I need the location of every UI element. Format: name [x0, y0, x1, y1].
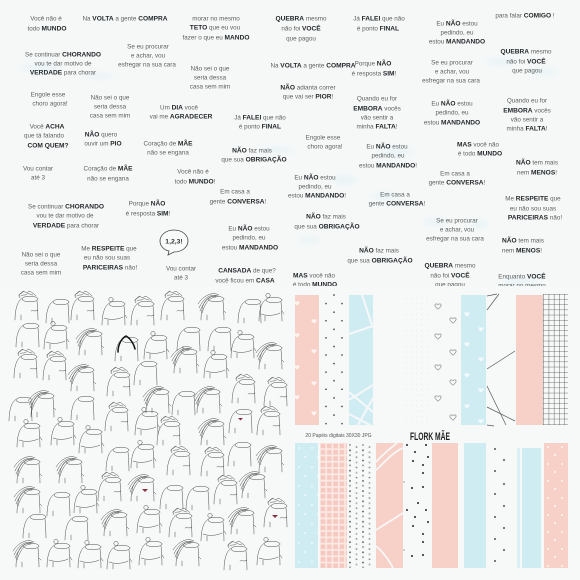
- phrase: Se continuar CHORANDO: vou te dar motivo de: [34, 60, 92, 67]
- phrase: Não sei o que: casa sem mim: [21, 269, 61, 276]
- phrase: Vou contar até 3: até 3: [174, 274, 188, 281]
- phrase: Em casa a gente CONVERSA: gente CONVERSA!: [429, 179, 485, 186]
- phrase: Eu NÃO estou pedindo: Eu NÃO estou: [366, 143, 408, 150]
- phrase: Coração de MÃE: Coração de MÃE: [84, 165, 132, 172]
- phrase: Se continuar CHORANDO: vou te dar motivo de: [36, 212, 94, 219]
- phrase: Você ACHA: que tá falando: [24, 132, 64, 139]
- phrase: Vou contar até 3: Vou contar: [23, 165, 53, 172]
- paper: black grid: [543, 294, 568, 425]
- phrase: Eu NÃO estou pedindo: pedindo, eu: [233, 234, 266, 241]
- phrase: Se eu procurar: Se eu procurar: [436, 217, 478, 224]
- phrase: QUEBRA mesmo: QUEBRA mesmo: [425, 262, 475, 269]
- panel: phrases: [21, 12, 562, 289]
- phrase: Já FALEI: é ponto FINAL: [357, 25, 399, 32]
- phrase: Já FALEI: é ponto FINAL: [239, 123, 281, 130]
- paper: blue strip: [517, 448, 541, 568]
- phrase: Coração de MÃE: não se engana: [147, 149, 189, 156]
- title: FLORK MÃE: FLORK MÃE: [410, 430, 450, 443]
- phrase: Você não é todo MUNDO: todo MUNDO: [28, 25, 66, 32]
- phrase: MAS você não: é todo MUNDO: [458, 150, 502, 157]
- phrase: Me RESPEITE: PARICEIRAS não!: [83, 264, 137, 271]
- phrase: Eu NÃO estou pedindo: pedindo, eu: [441, 29, 474, 36]
- phrase: Coração de MÃE: Coração de MÃE: [144, 140, 192, 147]
- paper: plain pink: [516, 295, 543, 425]
- phrase: NÃO faz mais: que sua OBRIGAÇÃO: [294, 223, 360, 230]
- figure with black hair: [115, 336, 138, 361]
- phrase: Você não é todo MUNDO: todo MUNDO!: [175, 178, 215, 185]
- phrase: Não sei o que: Não sei o que: [91, 94, 130, 101]
- phrase: NÃO tem mais: nem MENOS!: [517, 169, 557, 176]
- phrase: Porque NÃO: Porque NÃO: [355, 60, 391, 67]
- phrase: morar no mesmo teto: morar no mesmo: [192, 15, 240, 22]
- caption: 20 papéis digitais: 20 Papéis digitais 30X30 JPG: [305, 433, 372, 439]
- phrase: Porque NÃO: Porque NÃO: [129, 200, 165, 207]
- phrase: Em casa a gente CONVERSA: gente CONVERSA!: [210, 198, 266, 205]
- phrase: Enquanto VOCÊ: morar no mesmo: [498, 282, 546, 289]
- phrase: Se continuar CHORANDO: Se continuar CHORANDO: [28, 203, 104, 210]
- phrase: Se continuar CHORANDO: Se continuar CHORANDO: [25, 51, 101, 58]
- phrase: Se eu procurar: esfregar na sua cara: [422, 77, 480, 84]
- phrase: Quando eu for EMBORA: vão sentir a: [511, 116, 544, 123]
- phrase: Você ACHA: COM QUEM?: [27, 142, 69, 149]
- phrase: Quando eu for EMBORA: EMBORA vocês: [503, 107, 551, 114]
- panel: digital papers top row: [294, 293, 568, 427]
- phrase: Eu NÃO estou pedindo: estou MANDANDO: [222, 244, 278, 251]
- phrase: Quando eu for EMBORA: vão sentir a: [361, 114, 394, 121]
- figures row 2: [16, 321, 284, 369]
- panel: digital papers bottom row: [295, 443, 568, 568]
- figures row 4: [9, 374, 287, 435]
- paper: pink speckled: [544, 443, 568, 568]
- phrase: Eu NÃO estou pedindo: estou MANDANDO!: [359, 162, 417, 169]
- phrase: QUEBRA mesmo: QUEBRA mesmo: [501, 48, 551, 55]
- paper: blue hearts: [461, 295, 486, 425]
- paper: diagonal black lines: [487, 294, 515, 426]
- red details on figures: [142, 418, 278, 518]
- paper: black dots: [404, 444, 429, 557]
- panel: flork figures: [9, 291, 287, 570]
- figures row 6: [14, 440, 284, 483]
- figures row 8: [23, 498, 287, 541]
- phrase: MAS você não: MAS você não: [293, 272, 335, 279]
- phrase: QUEBRA mesmo: que pagou: [435, 281, 465, 288]
- phrase: morar no mesmo teto: fazer o que eu MANDO: [183, 34, 249, 41]
- phrase: NÃO quero ouvir um PIO: ouvir um PIO: [84, 140, 122, 147]
- phrase: Quando eu for EMBORA: Quando eu for: [507, 97, 547, 104]
- phrase: Eu NÃO estou pedindo: Eu NÃO estou: [294, 174, 336, 181]
- phrase: Você ACHA: Você ACHA: [30, 123, 64, 130]
- phrase: NÃO faz mais: NÃO faz mais: [359, 247, 399, 254]
- phrase: Não sei o que: Não sei o que: [191, 65, 230, 72]
- phrase: Um DIA você: Um DIA você: [160, 104, 198, 111]
- phrase: Porque NÃO: é resposta SIM!: [126, 210, 170, 217]
- phrase: Se eu procurar: e achar, vou: [131, 52, 166, 59]
- phrase: Em casa a gente CONVERSA: Em casa a: [220, 188, 250, 195]
- phrase: Quando eu for EMBORA: EMBORA vocês: [353, 105, 401, 112]
- phrase: Se eu procurar: esfregar na sua cara: [426, 235, 484, 242]
- phrase: MAS você não: é todo MUNDO: [293, 281, 337, 288]
- phrase: Não sei o que: seria dessa: [25, 260, 58, 267]
- phrase: Você não é todo MUNDO: Você não é: [30, 15, 62, 22]
- phrase: Engole esse choro agora: Engole esse: [306, 134, 341, 141]
- phrase: Se continuar CHORANDO: VERDADE para chorar: [33, 222, 99, 229]
- phrase: NÃO tem mais: nem MENOS!: [502, 247, 542, 254]
- phrase: Se eu procurar: esfregar na sua cara: [118, 61, 176, 68]
- phrase: Eu NÃO estou pedindo: pedindo, eu: [372, 152, 405, 159]
- phrase: QUEBRA mesmo: que pagou: [512, 67, 542, 74]
- phrase: Você não é todo MUNDO: Você não é: [177, 168, 209, 175]
- phrase: QUEBRA mesmo: que pagou: [286, 35, 316, 42]
- phrase: NÃO faz mais: que sua OBRIGAÇÃO: [347, 257, 413, 264]
- figures row 5: [17, 406, 280, 453]
- phrase: QUEBRA mesmo: QUEBRA mesmo: [276, 15, 326, 22]
- paper: pink speckle overlay: [544, 443, 568, 568]
- phrase: CANSADA de que: CANSADA de que?: [218, 267, 276, 274]
- phrase: Eu NÃO estou pedindo: pedindo, eu: [299, 183, 332, 190]
- phrase: QUEBRA mesmo: não foi VOCÊ: [281, 25, 321, 32]
- paper: black dots: [319, 293, 348, 427]
- phrase: Se eu procurar: Se eu procurar: [127, 43, 169, 50]
- phrase: Não sei o que: seria dessa: [94, 103, 127, 110]
- phrase: Não sei o que: Não sei o que: [22, 251, 61, 258]
- figures row 1: [15, 291, 284, 325]
- phrase: NÃO adianta correr: que vai ser PIOR!: [283, 93, 333, 100]
- phrase: CANSADA de que: você ficou em CASA: [215, 277, 275, 284]
- paper: pink hearts: [294, 295, 319, 425]
- phrase: Me RESPEITE: Me RESPEITE que: [505, 195, 561, 202]
- paper: outlined hearts: [435, 304, 456, 420]
- paper: pink with white lines: [376, 443, 403, 568]
- phrase: Eu NÃO estou pedindo: estou MANDANDO!: [288, 192, 346, 199]
- phrase: NÃO adianta correr: NÃO adianta correr: [280, 84, 336, 91]
- phrase: Na VOLTA a gente COMPRA: Na VOLTA a gente COMPRA: [270, 62, 356, 69]
- phrase: NÃO faz mais: que sua OBRIGAÇÃO: [221, 156, 287, 163]
- figures row 3: [14, 347, 229, 396]
- phrase: Já FALEI: Já FALEI que não: [353, 15, 405, 22]
- phrase: NÃO tem mais: NÃO tem mais: [516, 159, 558, 166]
- mask covering clipped phrases: [0, 286, 580, 580]
- paper: plain pink: [432, 443, 458, 568]
- phrase: Quando eu for EMBORA: minha FALTA!: [357, 123, 397, 130]
- phrase: Vou contar até 3: até 3: [31, 174, 45, 181]
- phrase: NÃO faz mais: NÃO faz mais: [306, 213, 346, 220]
- paper: faint dots: [403, 296, 430, 425]
- phrase: QUEBRA mesmo: não foi VOCÊ: [430, 272, 470, 279]
- phrase: QUEBRA mesmo: não foi VOCÊ: [506, 58, 546, 65]
- phrase: Me RESPEITE: eu não sou suas: [84, 254, 130, 261]
- figures row 9: [13, 537, 282, 570]
- phrase: Porque NÃO: é resposta SIM!: [352, 70, 396, 77]
- phrase: Eu NÃO estou pedindo: Eu NÃO estou: [431, 100, 473, 107]
- phrase: Quando eu for EMBORA: Quando eu for: [357, 95, 397, 102]
- phrase: NÃO quero ouvir um PIO: NÃO quero: [85, 131, 117, 138]
- paper: blue speckled: [295, 443, 318, 568]
- phrase: Engole esse choro agora: choro agora!: [32, 100, 68, 107]
- phrase: Engole esse choro agora: Engole esse: [31, 91, 66, 98]
- phrase: Eu NÃO estou pedindo: estou MANDANDO: [429, 38, 485, 45]
- phrase: Já FALEI: Já FALEI que não: [234, 114, 286, 121]
- phrase: NÃO tem mais: NÃO tem mais: [502, 237, 544, 244]
- paper: grey dots: [347, 443, 375, 568]
- phrase: Engole esse choro agora: choro agora!: [307, 143, 343, 150]
- phrase: Na VOLTA a gente COMPRA: Na VOLTA a gente COMPRA: [82, 15, 168, 22]
- phrase: para falar COMIGO: para falar COMIGO !: [495, 12, 555, 19]
- phrase: Se eu procurar: Se eu procurar: [431, 59, 473, 66]
- phrase: NÃO faz mais: NÃO faz mais: [232, 147, 272, 154]
- phrase: Não sei o que: casa sem mim: [190, 83, 230, 90]
- phrase: Eu NÃO estou pedindo: Eu NÃO estou: [436, 20, 478, 27]
- phrase: morar no mesmo teto: TETO que eu vou: [190, 24, 240, 31]
- paper: pink grid: [320, 443, 347, 568]
- figures row 7: [14, 472, 267, 516]
- phrase: Me RESPEITE: Me RESPEITE que: [81, 245, 137, 252]
- phrase: Se continuar CHORANDO: VERDADE para chorar: [30, 69, 96, 76]
- paper: blue speckle overlay: [295, 443, 318, 568]
- phrase: Em casa a gente CONVERSA: gente CONVERSA!: [369, 200, 425, 207]
- phrase: Um DIA você: vai me AGRADECER: [150, 113, 212, 120]
- speech bubble 1,2,3!: [160, 230, 188, 255]
- phrase: Em casa a gente CONVERSA: Em casa a: [440, 170, 470, 177]
- paper: plain blue: [464, 443, 486, 568]
- speech bubble 1,2,3!: 1,2,3!: [165, 238, 183, 246]
- phrase: Quando eu for EMBORA: minha FALTA!: [507, 125, 547, 132]
- phrase: Não sei o que: casa sem mim: [90, 112, 130, 119]
- phrase: Me RESPEITE: eu não sou suas: [510, 205, 556, 212]
- paper: blue with white lines: [349, 295, 373, 425]
- phrase: Se eu procurar: e achar, vou: [440, 226, 475, 233]
- phrase: Coração de MÃE: não se engana: [87, 175, 129, 182]
- phrase: Enquanto VOCÊ: Enquanto VOCÊ: [498, 273, 546, 280]
- paper: sparse dots: [494, 448, 505, 562]
- phrase: Eu NÃO estou pedindo: pedindo, eu: [436, 109, 469, 116]
- phrase: Se eu procurar: e achar, vou: [435, 68, 470, 75]
- phrase: Eu NÃO estou pedindo: Eu NÃO estou: [228, 225, 270, 232]
- phrase: Em casa a gente CONVERSA: Em casa a: [380, 191, 410, 198]
- phrase: Me RESPEITE: PARICEIRAS não!: [508, 214, 562, 221]
- watercolor smudges behind phrases: [18, 59, 559, 285]
- phrase: Vou contar até 3: Vou contar: [166, 265, 196, 272]
- phrase: Eu NÃO estou pedindo: estou MANDANDO: [424, 119, 480, 126]
- phrase: MAS você não: MAS você não: [457, 141, 499, 148]
- phrase: Não sei o que: seria dessa: [194, 74, 227, 81]
